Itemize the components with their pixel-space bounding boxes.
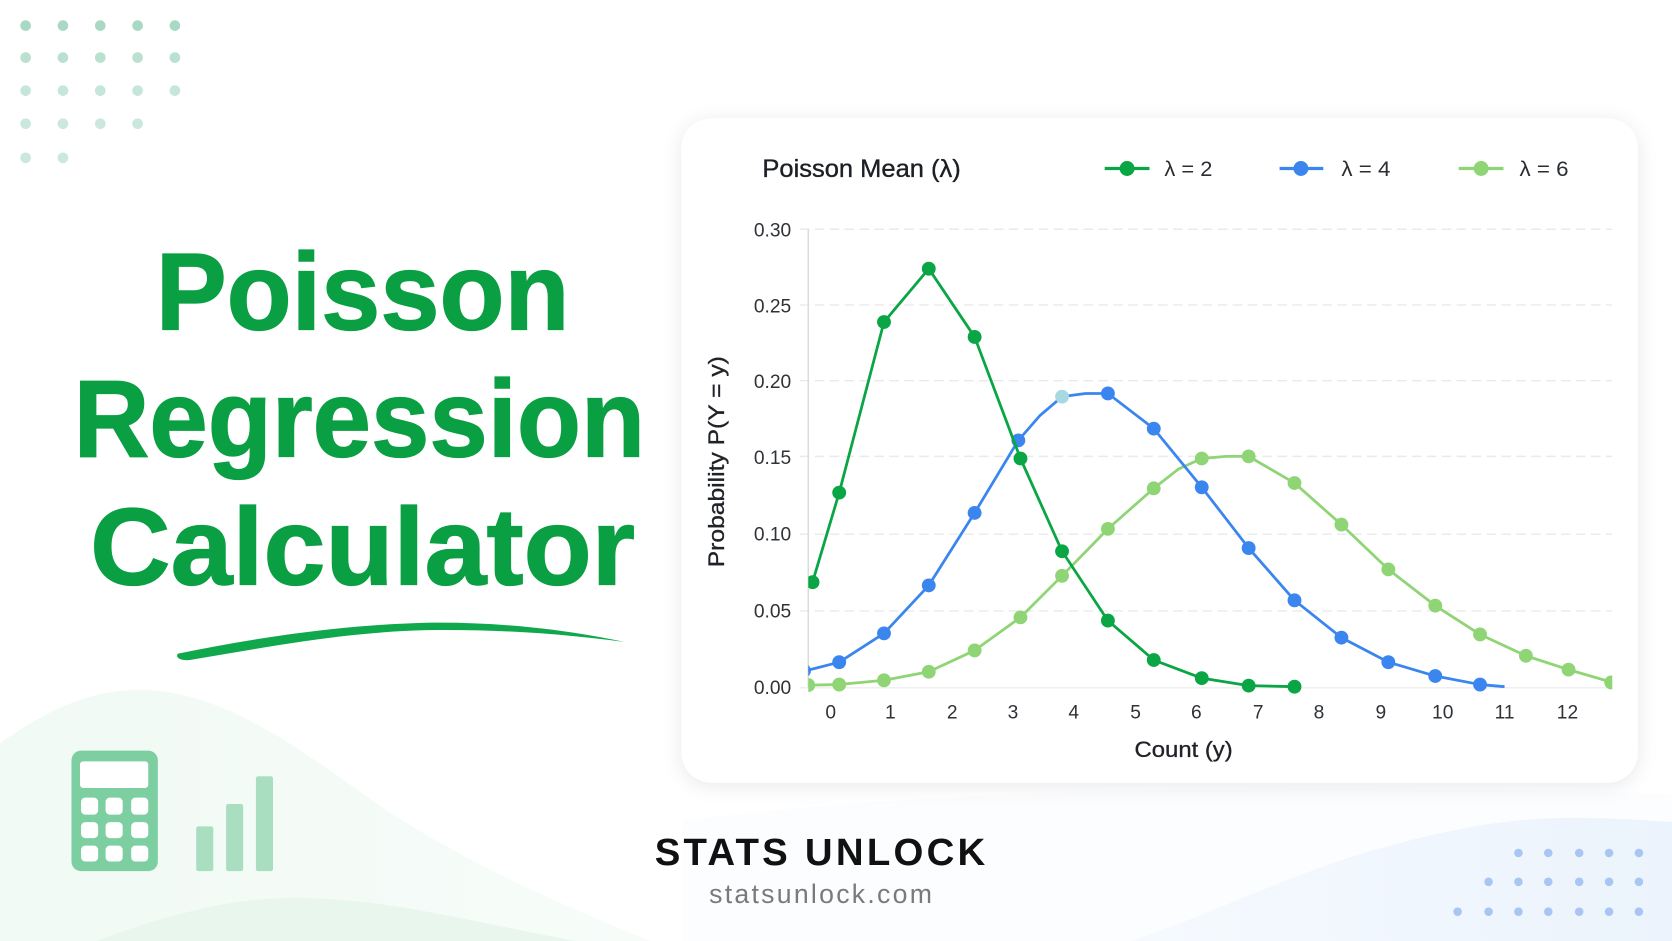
y axis title: Probability P(Y = y): [704, 356, 729, 567]
series: lambda 6: [801, 449, 1618, 692]
series: lambda 2: [806, 262, 1301, 694]
legend: λ = 2: [1164, 157, 1212, 181]
dot pattern: bottom right: [1453, 849, 1643, 916]
brush underline: [177, 623, 624, 660]
x axis labels: 10: [1432, 703, 1453, 724]
dot pattern: top left: [20, 20, 180, 163]
legend: [1105, 157, 1569, 181]
x axis labels: 4: [1068, 703, 1079, 724]
title: [74, 231, 645, 608]
x axis labels: 12: [1557, 703, 1578, 724]
series: lambda 4: [797, 387, 1505, 691]
background wave: pale blue haze: [682, 788, 1672, 941]
y axis labels: 0.15: [754, 448, 791, 469]
y axis labels: [754, 221, 791, 699]
x axis labels: 8: [1314, 703, 1324, 724]
y axis labels: 0.30: [754, 221, 791, 242]
title: Poisson: [156, 231, 569, 353]
x axis labels: 7: [1253, 703, 1264, 724]
background wave: green: [0, 690, 650, 941]
y axis labels: 0.20: [754, 372, 791, 393]
x axis labels: [825, 703, 1578, 724]
title: Calculator: [90, 486, 635, 608]
x axis title: Count (y): [1135, 737, 1233, 762]
x axis labels: 0: [825, 703, 836, 724]
background wave: blue: [1130, 818, 1672, 941]
legend title: Poisson Mean (λ): [762, 156, 961, 183]
y axis labels: 0.05: [754, 601, 791, 622]
icon: bar chart: [196, 776, 273, 871]
y axis labels: 0.10: [754, 525, 791, 546]
y axis labels: 0.00: [754, 678, 791, 699]
x axis labels: 5: [1130, 703, 1141, 724]
x axis labels: 11: [1495, 703, 1515, 724]
x axis labels: 6: [1191, 703, 1202, 724]
title: Regression: [74, 358, 645, 480]
icon: calculator: [71, 751, 158, 871]
brand name: STATS UNLOCK: [655, 831, 986, 874]
background wave: darker green: [96, 898, 576, 941]
x axis labels: 3: [1008, 703, 1018, 724]
y axis labels: 0.25: [754, 296, 791, 317]
legend: λ = 4: [1341, 157, 1391, 181]
x axis labels: 9: [1376, 703, 1386, 724]
x axis labels: 2: [947, 703, 958, 724]
panel: chart card: [681, 118, 1638, 783]
legend: λ = 6: [1519, 157, 1569, 181]
x axis labels: 1: [885, 703, 896, 724]
brand url: statsunlock.com: [709, 879, 932, 909]
